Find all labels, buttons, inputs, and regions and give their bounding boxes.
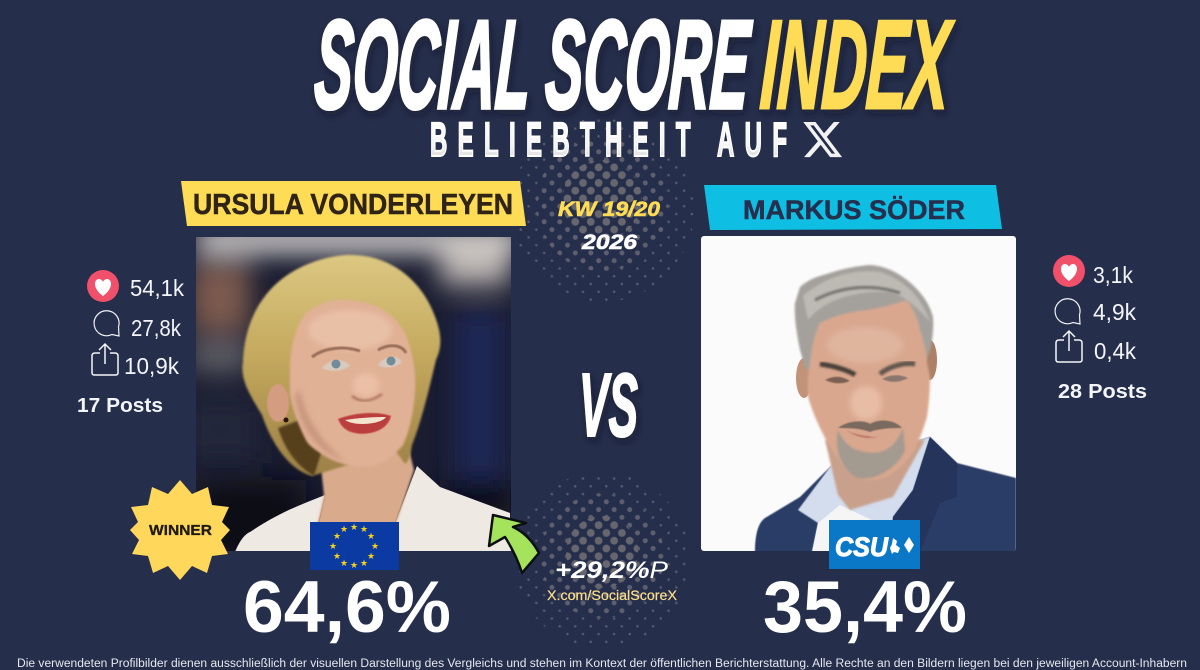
icon: comment bubble: [1055, 299, 1080, 324]
icon: EU flag: ★: [360, 524, 368, 534]
footer disclaimer: Die verwendeten Profilbilder dienen ausschließlich der visuellen Darstellung des Vergleichs und stehen im Kontext der öffentlichen Berichterstattung. Alle Rechte an den Bildern liegen bei den jeweiligen Account-Inhabern: [17, 658, 1187, 670]
suit: [755, 437, 1016, 552]
icon: CSU logo: [829, 520, 920, 569]
name banner: Markus Söder: MARKUS SÖDER: [743, 195, 965, 225]
icon: heart: [87, 270, 119, 302]
difference and source: [547, 557, 678, 603]
arrow: green up arrow: [489, 515, 539, 573]
icon: EU flag: ★: [350, 522, 358, 532]
stats: Ursula von der Leyen: 27,8k: [131, 315, 181, 341]
stats: Ursula von der Leyen: 10,9k: [124, 353, 179, 379]
hair shadow: [278, 420, 322, 476]
icon: heart: [1053, 255, 1085, 287]
stats: Markus Söder: 4,9k: [1093, 299, 1136, 325]
neck: [316, 450, 416, 522]
icon: EU flag: ★: [360, 558, 368, 568]
stats: Markus Söder: 0,4k: [1094, 338, 1136, 364]
eyes: [825, 377, 850, 383]
icon: comment bubble: [94, 311, 119, 336]
hair back: [242, 255, 440, 476]
icon: EU flag: ★: [333, 531, 341, 541]
jacket: [235, 466, 511, 552]
mouth: [338, 413, 391, 434]
beard: [837, 428, 905, 478]
icon: EU flag: ★: [367, 551, 375, 561]
face: [290, 300, 415, 466]
mouth: [848, 431, 878, 438]
badge: winner: WINNER: [149, 522, 212, 539]
face: [808, 300, 930, 480]
date: calendar week: [558, 198, 660, 254]
icon: EU flag: ★: [371, 541, 379, 551]
neck: [825, 440, 925, 510]
stats: Ursula von der Leyen: [77, 270, 184, 417]
name banner: Markus Söder: [704, 185, 1002, 230]
stats: Markus Söder: 28 Posts: [1058, 381, 1147, 403]
nose: [850, 386, 882, 420]
cheek shade: [294, 392, 340, 460]
forehead light: [308, 310, 392, 350]
brows: [820, 364, 855, 375]
date: calendar week: 2026: [581, 231, 637, 254]
icon: EU flag: ★: [367, 531, 375, 541]
forehead light: [827, 327, 903, 363]
stats: Ursula von der Leyen: 54,1k: [130, 275, 184, 301]
score: Markus Söder: 35,4%: [763, 567, 967, 648]
icon: EU flag: ★: [329, 541, 337, 551]
icon: EU flag: [310, 522, 399, 570]
text: VS: [579, 356, 638, 456]
hair highlight: [803, 271, 930, 322]
portrait: Ursula von der Leyen: [196, 237, 511, 551]
brows and eyes: [312, 348, 360, 357]
ears: [796, 358, 812, 398]
portrait: Markus Söder: [701, 236, 1016, 552]
stats: Markus Söder: [1053, 255, 1147, 403]
hair: [795, 265, 933, 370]
difference and source: +29,2% P: [555, 557, 668, 584]
icon: CSU logo: CSU: [835, 532, 889, 562]
nose: [352, 394, 382, 401]
icon: EU flag: ★: [340, 524, 348, 534]
ear: [267, 384, 289, 422]
stats: Markus Söder: 3,1k: [1093, 262, 1133, 288]
date: calendar week: KW 19/20: [558, 198, 660, 221]
stats: Ursula von der Leyen: 17 Posts: [77, 395, 163, 417]
shirt: [798, 437, 930, 552]
name banner: Ursula von der Leyen: URSULA VONDERLEYEN: [193, 189, 513, 221]
subtitle: BELIEBTHEIT AUF: [430, 114, 787, 167]
icon: X logo: [803, 122, 842, 157]
halftone dot texture: [510, 118, 694, 648]
badge: winner: [130, 480, 230, 580]
icon: share: [1056, 331, 1082, 362]
icon: EU flag: ★: [340, 558, 348, 568]
difference and source: X.com/SocialScoreX: [547, 587, 678, 603]
moustache: [838, 421, 902, 432]
score: Ursula von der Leyen: 64,6%: [243, 567, 451, 648]
icon: share: [92, 344, 118, 375]
icon: EU flag: ★: [333, 551, 341, 561]
name banner: Ursula von der Leyen: [181, 181, 526, 226]
icon: EU flag: ★: [350, 560, 358, 570]
